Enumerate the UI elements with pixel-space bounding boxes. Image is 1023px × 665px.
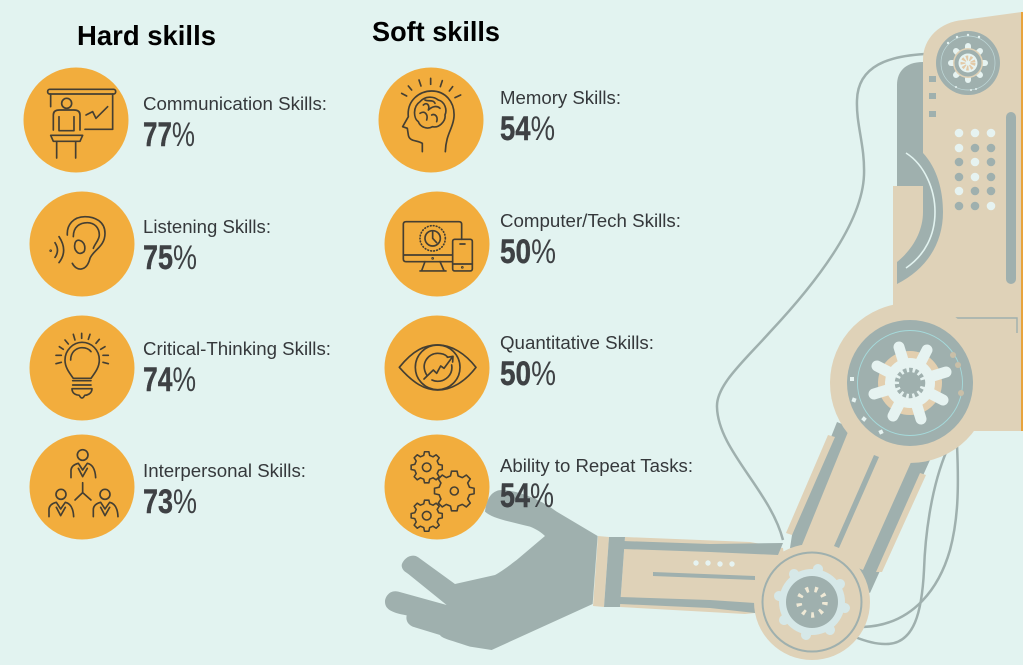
badge circle bbox=[384, 192, 490, 296]
icon: presenter at board bbox=[48, 89, 116, 158]
label: Computer/Tech Skills: bbox=[500, 211, 681, 231]
badge circle bbox=[384, 316, 490, 420]
forearm bbox=[593, 536, 790, 614]
badge circle bbox=[384, 434, 490, 540]
label: Quantitative Skills: bbox=[500, 333, 654, 353]
vertical grey bar bbox=[1006, 112, 1016, 284]
skill: Quantitative Skills bbox=[384, 316, 654, 420]
value: 73% bbox=[143, 483, 197, 521]
badge circle bbox=[30, 316, 134, 420]
skill: Communication Skills bbox=[24, 68, 327, 172]
skill: Ability to Repeat Tasks bbox=[384, 434, 693, 540]
skill: Computer/Tech Skills bbox=[384, 192, 681, 296]
label: Memory Skills: bbox=[500, 88, 621, 108]
icon: people network bbox=[49, 450, 118, 517]
value: 54% bbox=[500, 477, 554, 515]
icon: monitor and phone bbox=[403, 222, 472, 271]
value: 50% bbox=[500, 233, 556, 271]
icon: ear with sound waves bbox=[50, 217, 105, 269]
upper arm body bbox=[893, 12, 1022, 431]
icon: light bulb bbox=[56, 333, 108, 398]
wires: lower loops bbox=[850, 445, 958, 644]
label: Interpersonal Skills: bbox=[143, 461, 306, 481]
icon: three gears bbox=[411, 452, 474, 531]
label: Communication Skills: bbox=[143, 94, 327, 114]
top wheel bbox=[936, 31, 1000, 95]
badge circle bbox=[378, 68, 484, 172]
large shoulder joint bbox=[830, 303, 990, 463]
robot hand bbox=[385, 490, 598, 650]
value: 75% bbox=[143, 239, 197, 277]
skill: Listening Skills bbox=[30, 192, 271, 296]
icon: head with brain bbox=[402, 78, 461, 152]
skill: Critical-Thinking Skills bbox=[30, 316, 331, 420]
icon: eye with growth chart bbox=[399, 345, 476, 390]
label: Listening Skills: bbox=[143, 217, 271, 237]
corner bracket bbox=[953, 318, 1017, 333]
value: 50% bbox=[500, 355, 556, 393]
skill: Interpersonal Skills bbox=[30, 434, 306, 540]
lower arm bbox=[786, 422, 930, 593]
value: 74% bbox=[143, 361, 196, 399]
value: 77% bbox=[143, 116, 195, 154]
title: Soft skills: Soft skills bbox=[372, 16, 500, 47]
title: Hard skills: Hard skills bbox=[77, 20, 216, 51]
badge circle bbox=[24, 68, 128, 172]
grey crescent bbox=[897, 153, 943, 284]
skill: Memory Skills bbox=[378, 68, 621, 172]
badge circle bbox=[30, 192, 134, 296]
orange edge line bbox=[1021, 12, 1023, 431]
dot grid bbox=[955, 129, 995, 210]
value: 54% bbox=[500, 110, 555, 148]
robot arm illustration bbox=[385, 12, 1023, 660]
label: Critical-Thinking Skills: bbox=[143, 339, 331, 359]
crescent highlight bbox=[906, 153, 935, 268]
grey housing bbox=[897, 62, 923, 186]
wire: upper loop bbox=[717, 54, 925, 540]
square indicators bbox=[929, 76, 936, 117]
badge circle bbox=[30, 434, 134, 540]
label: Ability to Repeat Tasks: bbox=[500, 456, 693, 476]
elbow joint bbox=[754, 544, 870, 660]
